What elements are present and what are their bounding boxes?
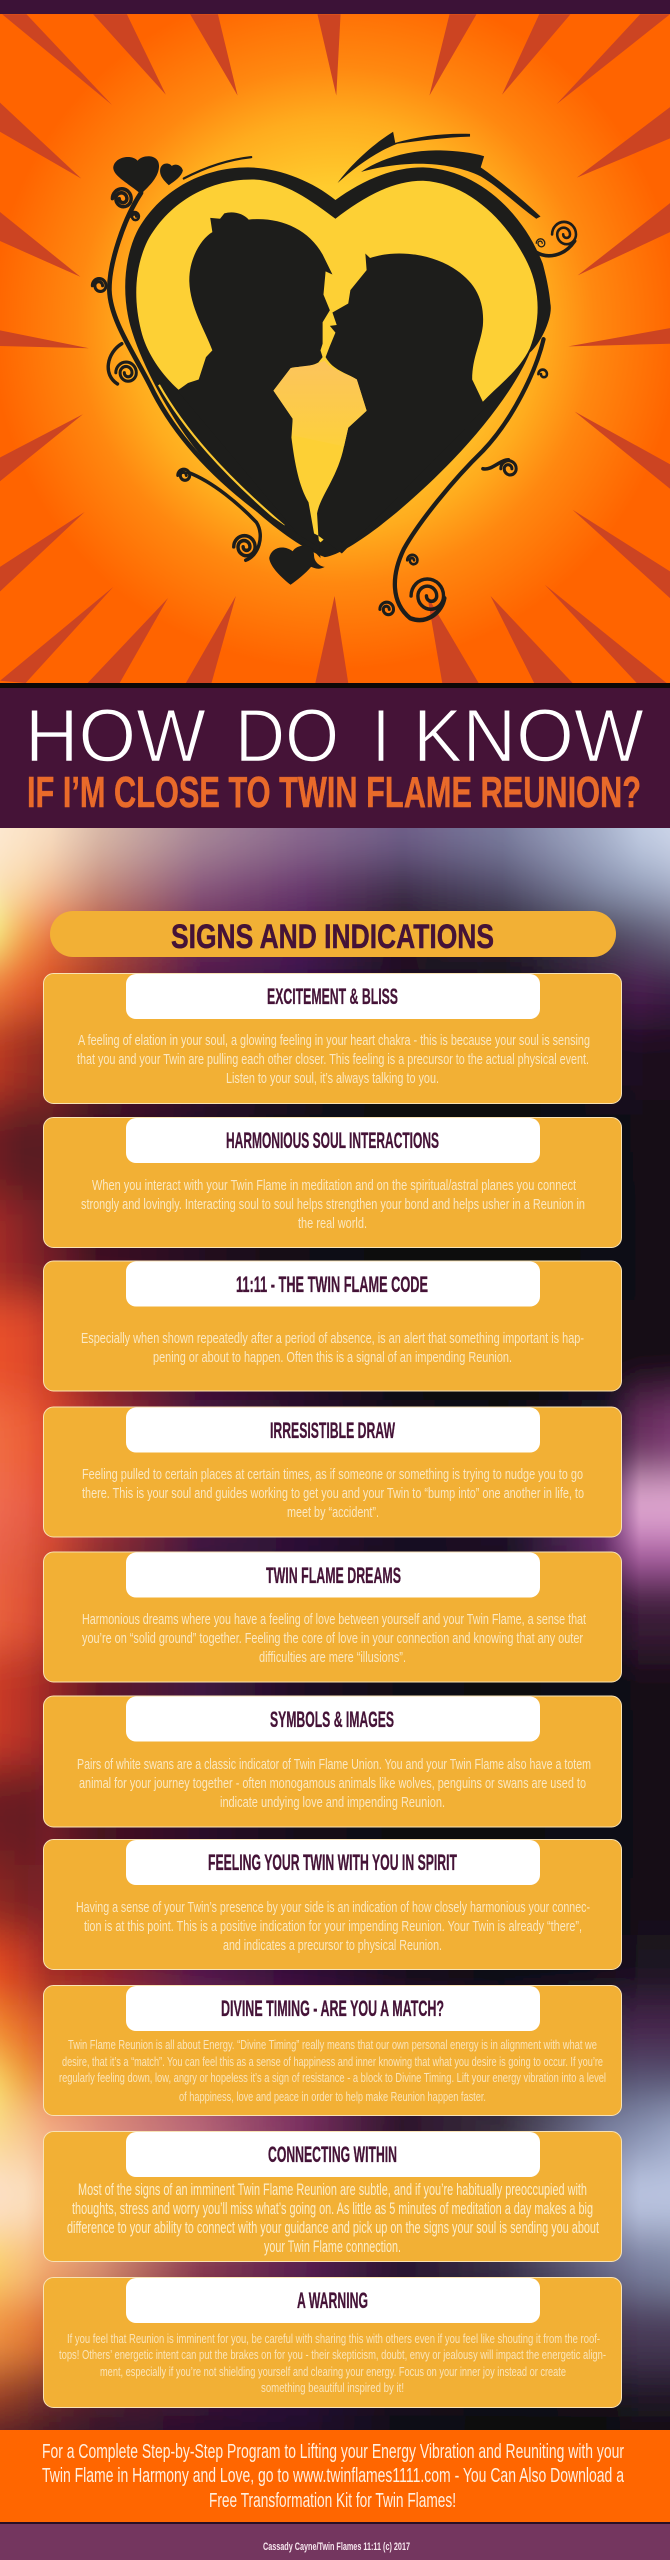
watercolor background	[0, 760, 670, 2520]
title line one: HOW	[25, 694, 206, 778]
title background	[0, 688, 670, 828]
heading: CONNECTING WITHIN	[268, 2142, 397, 2167]
panel: connecting within	[44, 2132, 622, 2262]
heading: FEELING YOUR TWIN WITH YOU IN SPIRIT	[208, 1850, 457, 1875]
body text	[59, 2331, 606, 2395]
body text	[59, 2037, 606, 2104]
panel: divine timing	[44, 1986, 622, 2116]
footer band	[0, 2522, 670, 2560]
heading: SYMBOLS & IMAGES	[270, 1707, 394, 1732]
panel: symbols and images	[44, 1696, 622, 1827]
panel: feeling your twin with you in spirit	[44, 1840, 622, 1970]
heading: EXCITEMENT & BLISS	[267, 984, 398, 1009]
man silhouette	[177, 212, 332, 558]
body text	[82, 1611, 587, 1666]
woman silhouette	[317, 253, 491, 554]
body text	[81, 1177, 585, 1232]
hero sunburst illustration	[0, 14, 670, 684]
heart with kissing couple silhouette	[92, 132, 576, 620]
body text	[77, 1756, 591, 1811]
body text: meet by “accident”.	[287, 1504, 379, 1521]
hero bottom rule	[0, 683, 670, 688]
panel: irresistible draw	[44, 1407, 622, 1537]
heart frame	[125, 167, 551, 557]
body text: your Twin Flame connection.	[264, 2238, 401, 2256]
panel: harmonious soul interactions	[44, 1118, 622, 1248]
title line one: DO	[235, 694, 339, 778]
small heart at bottom	[269, 546, 325, 585]
heading: TWIN FLAME DREAMS	[266, 1563, 401, 1588]
credit line: Cassady Cayne/Twin Flames 11:11 (c) 2017	[263, 2541, 410, 2553]
call to action band	[0, 2430, 670, 2522]
body text: the real world.	[298, 1215, 367, 1232]
light gap between the faces	[273, 361, 367, 446]
call to action text	[42, 2441, 625, 2512]
section heading pill: SIGNS AND INDICATIONS	[171, 918, 494, 956]
panel: a warning	[44, 2278, 622, 2408]
heading: DIVINE TIMING - ARE YOU A MATCH?	[221, 1996, 444, 2021]
panel: twin flame dreams	[44, 1552, 622, 1682]
body text	[81, 1330, 584, 1366]
body text	[82, 1466, 584, 1521]
heading: HARMONIOUS SOUL INTERACTIONS	[226, 1128, 439, 1153]
top border band	[0, 0, 670, 14]
body text: something beautiful inspired by it!	[261, 2380, 404, 2395]
call to action text: Free Transformation Kit for Twin Flames!	[209, 2490, 456, 2512]
body text: and indicates a precursor to physical Reunion.	[223, 1937, 442, 1954]
small hearts upper left	[113, 156, 183, 194]
body text: Listen to your soul, it’s always talking to you.	[226, 1070, 439, 1087]
body text: of happiness, love and peace in order to help make Reunion happen faster.	[179, 2089, 486, 2104]
heading: 11:11 - THE TWIN FLAME CODE	[236, 1272, 428, 1297]
section heading pill	[50, 911, 616, 957]
sunburst background	[0, 14, 670, 684]
body text: difficulties are mere “illusions”.	[259, 1649, 406, 1666]
title line one: I	[372, 694, 390, 778]
heading: IRRESISTIBLE DRAW	[270, 1418, 395, 1443]
title band	[0, 688, 670, 828]
heading: A WARNING	[297, 2288, 368, 2313]
title line one: KNOW	[413, 694, 644, 778]
body text: indicate undying love and impending Reunion.	[220, 1794, 445, 1811]
title line one	[25, 694, 644, 778]
heart interior glow	[136, 179, 538, 542]
sunburst rays	[0, 14, 670, 683]
gold slit along lower left of frame	[159, 385, 284, 526]
panel: 11:11 the twin flame code	[44, 1261, 622, 1391]
vines and spirals	[92, 157, 576, 620]
body text	[67, 2181, 599, 2256]
body text	[76, 1899, 590, 1954]
panel: excitement and bliss	[44, 974, 622, 1104]
body text: pening or about to happen. Often this is a signal of an impending Reunion.	[153, 1349, 512, 1366]
body text	[77, 1032, 590, 1087]
flourishes at heart top	[338, 132, 541, 219]
